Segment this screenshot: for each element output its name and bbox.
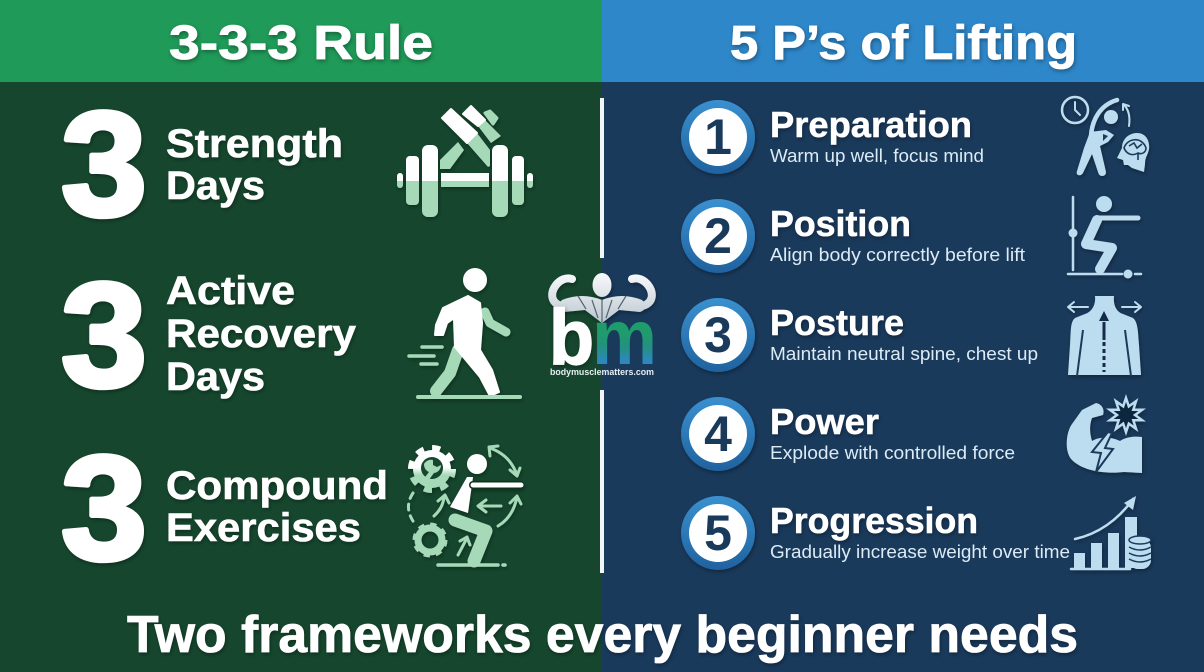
item: preparation: Warm up well, focus mind [770, 146, 984, 166]
item: power: Explode with controlled force [770, 443, 1015, 463]
item: preparation [681, 100, 984, 174]
item: preparation: Preparation [770, 104, 972, 145]
item: position: 2 [704, 208, 732, 264]
icon: dumbbells [397, 106, 533, 217]
item: posture [681, 298, 1038, 372]
item: active recovery days: Active [166, 269, 295, 313]
item: strength days: 3 [61, 82, 147, 247]
logo: bodymusclematters [549, 273, 657, 381]
heading: 5 P's of Lifting: 5 P’s of Lifting [730, 17, 1077, 70]
item: preparation: 1 [704, 109, 732, 165]
item: power [681, 397, 1015, 471]
item: position [681, 199, 1025, 273]
icon: squat with gears [408, 446, 521, 565]
item: position: Align body correctly before lift [770, 245, 1025, 265]
icon: flexed arm with bolt and star [1067, 398, 1142, 473]
item: posture: 3 [704, 307, 732, 363]
logo letter b: b [549, 293, 594, 381]
item: progression: 5 [704, 505, 732, 561]
heading: 3-3-3 Rule: 3-3-3 Rule [169, 17, 433, 70]
item: strength days: Strength [166, 122, 343, 166]
footer tagline: Two frameworks every beginner needs [127, 606, 1078, 664]
icon: walking figure [409, 268, 520, 397]
item: active recovery days: Recovery [166, 312, 357, 356]
item: power: 4 [704, 406, 732, 462]
icon: back with spine [1068, 296, 1141, 376]
panel: 5 P's items [681, 97, 1151, 570]
panel: 3-3-3 Rule items [61, 82, 533, 591]
icon: stretching figure, clock, brain [1062, 97, 1149, 176]
item: compound exercises: Compound [166, 464, 388, 508]
item: position: Position [770, 203, 911, 244]
icon: growth chart with coins [1071, 496, 1151, 569]
item: progression [681, 496, 1070, 570]
item: active recovery days: Days [166, 355, 265, 399]
item: compound exercises: Exercises [166, 506, 361, 550]
logo url: bodymusclematters.com [550, 367, 654, 377]
item: compound exercises [61, 426, 388, 591]
item: strength days [61, 82, 343, 247]
icon: squat alignment [1068, 196, 1141, 278]
item: power: Power [770, 401, 879, 442]
item: posture: Maintain neutral spine, chest up [770, 344, 1038, 364]
item: progression: Gradually increase weight over time [770, 542, 1070, 562]
item: strength days: Days [166, 164, 265, 208]
logo letter m: m [592, 293, 657, 381]
item: active recovery days: 3 [61, 253, 147, 418]
icon: muscular figure [552, 273, 652, 323]
item: progression: Progression [770, 500, 978, 541]
item: posture: Posture [770, 302, 904, 343]
item: compound exercises: 3 [61, 426, 147, 591]
item: active recovery days [61, 253, 357, 418]
